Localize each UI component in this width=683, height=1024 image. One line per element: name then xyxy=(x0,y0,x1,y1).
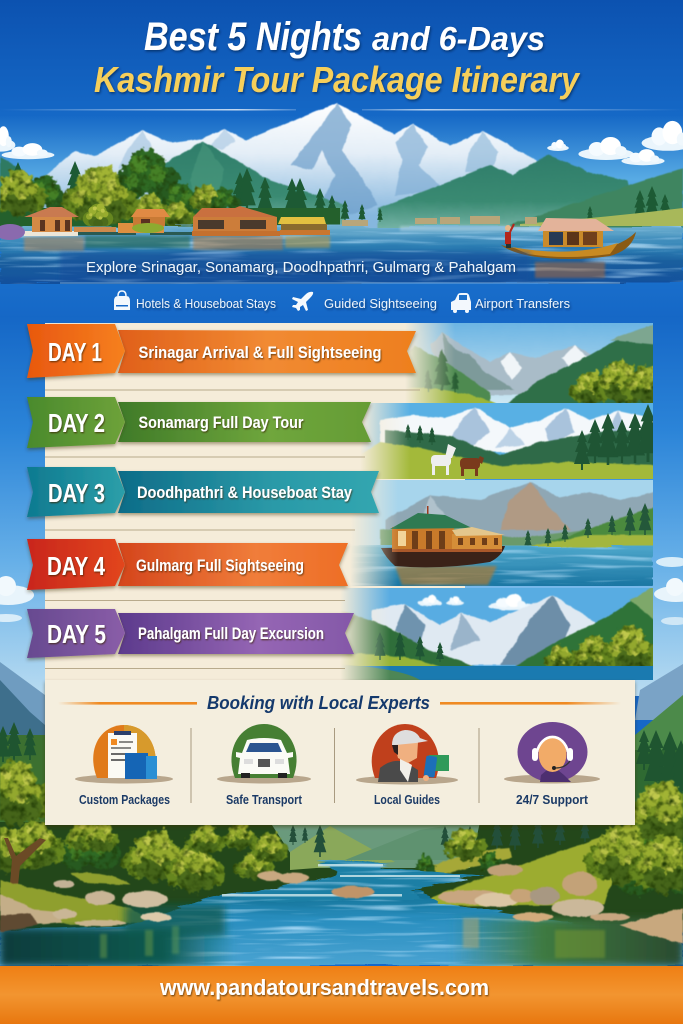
title: Kashmir Tour Package Itinerary xyxy=(94,59,581,100)
label: local guides: Local Guides xyxy=(374,793,440,807)
day 2 ribbon: DAY 2 xyxy=(48,408,105,438)
lake reflections xyxy=(24,226,683,278)
photo: Sonamarg meadow and horses xyxy=(362,403,653,479)
shore forest xyxy=(0,149,671,229)
title xyxy=(94,15,581,100)
far houseboats xyxy=(342,216,537,226)
rocks xyxy=(0,864,683,944)
website url: www.pandatoursandtravels.com xyxy=(159,975,489,1000)
centre pines xyxy=(289,825,590,857)
heading: Booking with Local Experts xyxy=(207,693,430,713)
river pool xyxy=(0,890,683,966)
icon: custom packages xyxy=(75,725,173,784)
photo: Doodhpathri houseboat on lake xyxy=(352,480,653,586)
dividers xyxy=(190,728,480,803)
icon: white horse xyxy=(431,444,456,475)
day 2 ribbon: Sonamarg Full Day Tour xyxy=(138,413,304,432)
shikara boat xyxy=(501,218,636,259)
left and middle trees xyxy=(0,761,501,893)
title: Best 5 Nights xyxy=(144,15,362,59)
header scene: lake, mountains and houseboats xyxy=(0,103,683,284)
icon: local guides xyxy=(356,724,458,784)
river channel xyxy=(225,861,485,900)
header divider lines xyxy=(0,109,683,284)
label: custom packages: Custom Packages xyxy=(79,793,170,807)
icon: hotel xyxy=(114,291,130,310)
green mountains xyxy=(0,141,683,232)
side pines xyxy=(0,722,683,800)
header background xyxy=(0,0,683,320)
itinerary panel background xyxy=(45,323,465,681)
day 3 ribbon xyxy=(27,467,379,517)
feature row: Airport Transfers xyxy=(475,296,570,311)
day 3 ribbon: DAY 3 xyxy=(48,478,105,508)
snow mountains xyxy=(40,103,545,230)
footer bar xyxy=(0,966,683,1024)
landscape background: mountains, forest, river xyxy=(0,662,683,966)
subtitle band xyxy=(60,252,530,282)
icon: car xyxy=(451,293,471,313)
lake xyxy=(0,226,683,284)
houseboat xyxy=(381,506,505,567)
side sky background xyxy=(0,316,683,696)
feature row: Guided Sightseeing xyxy=(324,296,437,311)
day 5 ribbon xyxy=(27,609,354,658)
panel: booking with local experts xyxy=(45,680,635,825)
day 5 ribbon: Pahalgam Full Day Excursion xyxy=(138,624,324,643)
panel ruled lines xyxy=(45,390,420,669)
valley haze xyxy=(270,822,480,868)
feature row xyxy=(114,291,570,313)
shoreline reflections xyxy=(100,918,605,958)
right trees xyxy=(584,781,683,895)
day 4 ribbon: DAY 4 xyxy=(47,551,105,581)
lakeside houses xyxy=(0,206,330,240)
icon: 24/7 support xyxy=(504,722,600,784)
photo fade overlays xyxy=(45,323,455,680)
day 1 ribbon xyxy=(27,324,416,378)
subtitle: Explore Srinagar, Sonamarg, Doodhpathri, Gulmarg & Pahalgam xyxy=(86,259,516,276)
side clouds xyxy=(0,557,683,625)
right meadow xyxy=(430,838,612,906)
water reflections xyxy=(0,905,683,966)
left meadow xyxy=(0,880,150,925)
day 1 ribbon: Srinagar Arrival & Full Sightseeing xyxy=(138,343,382,362)
icon: brown horse xyxy=(460,456,484,476)
day 3 ribbon: Doodhpathri & Houseboat Stay xyxy=(137,483,352,502)
photo: Pahalgam valley and river xyxy=(342,588,653,680)
icon: plane xyxy=(292,292,313,311)
day 4 ribbon: Gulmarg Full Sightseeing xyxy=(136,556,304,575)
label: 24/7 support: 24/7 Support xyxy=(516,793,589,807)
day 4 ribbon xyxy=(27,539,348,590)
photo: Srinagar mountain valley xyxy=(408,323,653,403)
tree trunk xyxy=(4,838,46,884)
scene clouds xyxy=(0,121,683,165)
label: safe transport: Safe Transport xyxy=(226,793,303,807)
icon: safe transport xyxy=(217,724,311,784)
title: and 6-Days xyxy=(372,20,545,57)
feature row: Hotels & Houseboat Stays xyxy=(136,296,276,311)
dark forest base xyxy=(0,822,683,932)
day 2 ribbon xyxy=(27,397,371,448)
day 1 ribbon: DAY 1 xyxy=(48,337,102,367)
day 5 ribbon: DAY 5 xyxy=(47,619,106,649)
